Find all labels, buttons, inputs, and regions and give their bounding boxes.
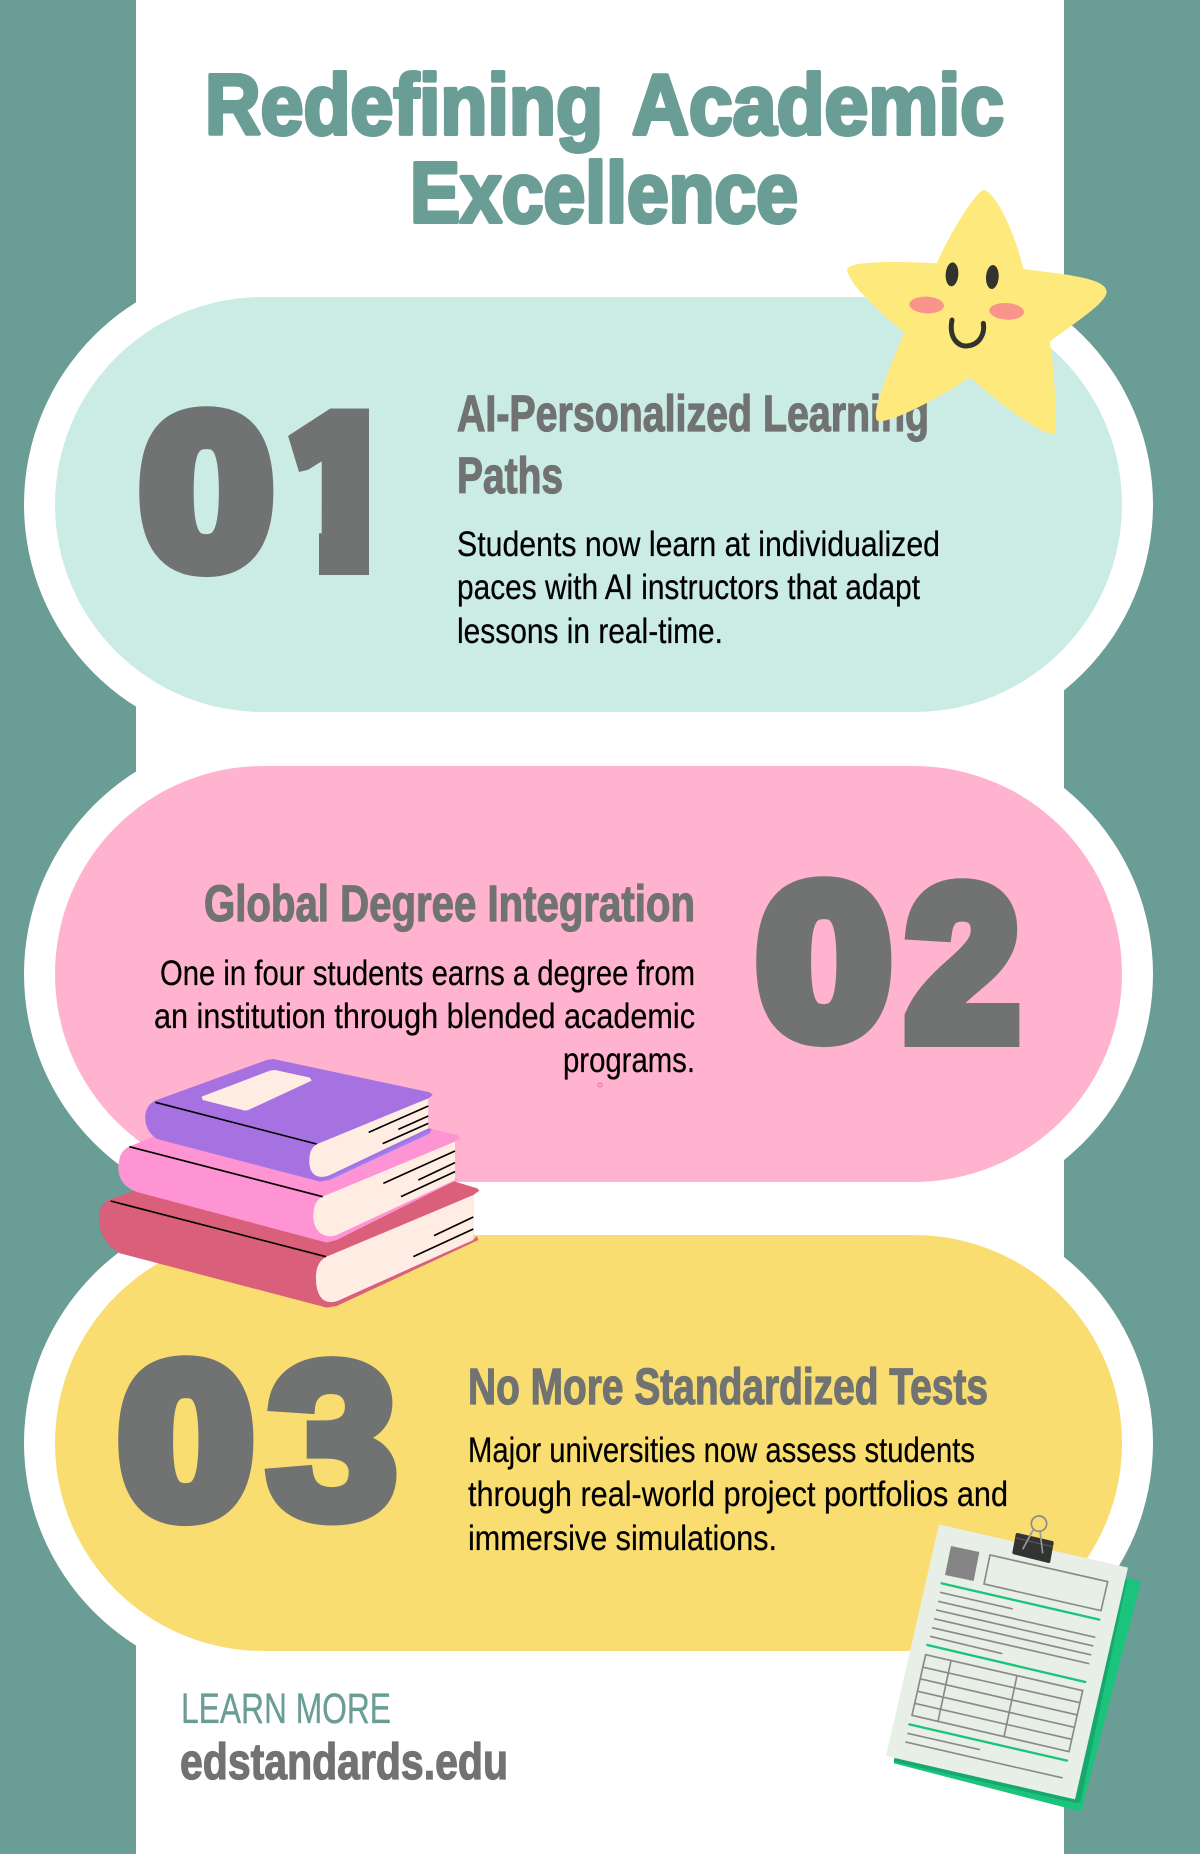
body text 02: an institution through blended academic (154, 997, 695, 1036)
panel background: mint pill (55, 297, 1122, 712)
panel: 03 no more standardized tests (55, 1235, 1122, 1651)
heading: AI-Personalized Learning Paths: Paths (457, 447, 563, 504)
heading: AI-Personalized Learning Paths (457, 385, 929, 504)
icon: smiling star (847, 190, 1107, 434)
body text 03 (468, 1431, 1008, 1558)
body text 03: Major universities now assess students (468, 1431, 975, 1470)
label: LEARN MORE: LEARN MORE (181, 1685, 391, 1733)
title: Academic (632, 58, 1004, 153)
body text 03: through real-world project portfolios and (468, 1475, 1008, 1514)
panel background: yellow pill (55, 1235, 1122, 1651)
body text 01: paces with AI instructors that adapt (457, 568, 920, 607)
number 03 (120, 1319, 398, 1563)
url: edstandards.edu: edstandards.edu (180, 1733, 508, 1790)
top book (145, 1059, 433, 1182)
footer: learn more (180, 1685, 508, 1790)
body text 03: immersive simulations. (468, 1519, 777, 1558)
middle book (118, 1128, 460, 1243)
body text 02 (154, 954, 695, 1080)
icon: stack of books (99, 1059, 479, 1308)
body text 01 (457, 525, 940, 651)
panel background: pink pill (55, 766, 1122, 1182)
heading: AI-Personalized Learning Paths: AI-Personalized Learning (457, 385, 929, 442)
number 01: 1 (282, 373, 400, 611)
number 01 (139, 406, 369, 578)
heading: No More Standardized Tests: No More Standardized Tests (468, 1358, 988, 1415)
number 02: 0 (758, 843, 890, 1081)
number 03: 3 (268, 1319, 398, 1563)
number 02: 2 (907, 845, 1018, 1083)
number 01: 0 (141, 373, 272, 611)
body text 01: lessons in real-time. (457, 612, 723, 651)
number 03: 0 (120, 1322, 252, 1560)
body text 02: programs. (563, 1041, 695, 1080)
bottom book (99, 1182, 479, 1308)
icon: clipboard document (886, 1516, 1141, 1812)
title: Redefining (205, 58, 603, 153)
body text 01: Students now learn at individualized (457, 525, 940, 564)
heading: Global Degree Integration: Global Degree Integration (204, 875, 695, 932)
title: Excellence (410, 146, 798, 241)
number 02 (758, 843, 1018, 1083)
panel: 01 AI-personalized learning (55, 297, 1122, 712)
title (205, 58, 1004, 241)
body text 02: One in four students earns a degree from (160, 954, 695, 993)
panel: 02 global degree integration (55, 766, 1122, 1182)
